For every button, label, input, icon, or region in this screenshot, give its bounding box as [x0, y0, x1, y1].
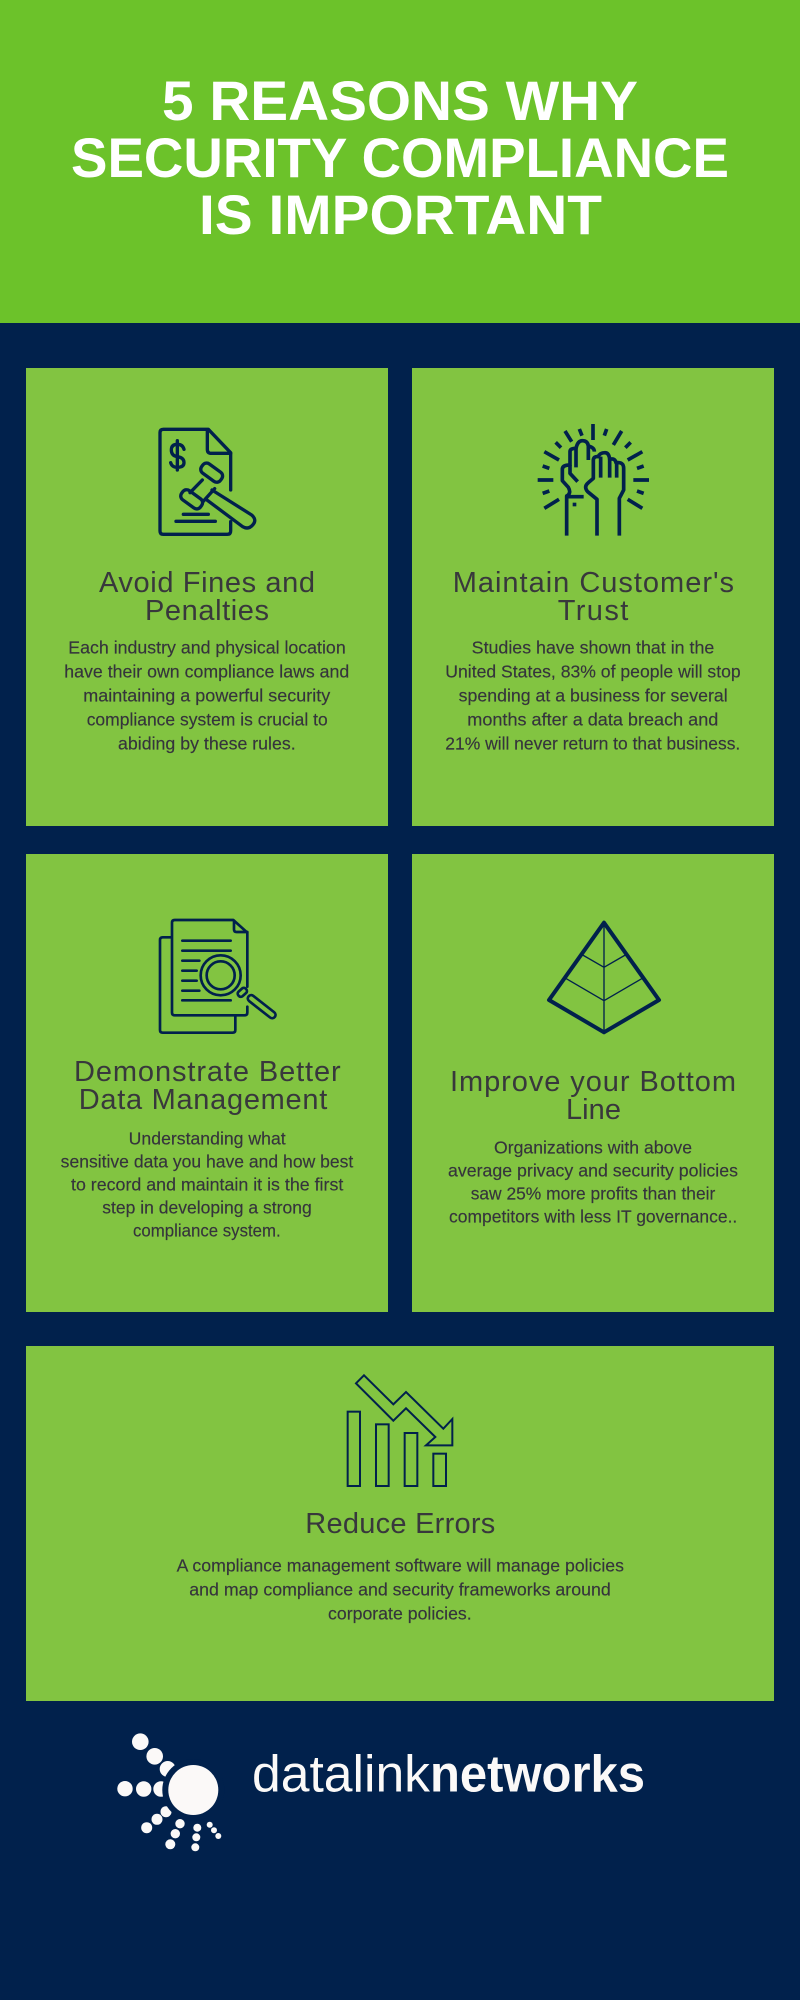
panel: improve your bottom line [412, 854, 774, 1312]
body text: and map compliance and security frameworks around [189, 1579, 611, 1599]
logo wordmark [252, 1746, 645, 1804]
heading: Improve your Bottom [450, 1066, 736, 1098]
body text [64, 637, 349, 753]
body text [445, 637, 741, 753]
heading: Line [566, 1094, 621, 1126]
body text [448, 1137, 738, 1226]
title: SECURITY COMPLIANCE [71, 126, 729, 189]
header banner [0, 0, 800, 323]
heading: Penalties [145, 595, 269, 627]
heading [99, 567, 315, 627]
panel: avoid fines and penalties [26, 368, 388, 826]
body text: Understanding what [129, 1128, 286, 1148]
icon: raised hands with rays [538, 424, 649, 536]
icon: pyramid [549, 923, 659, 1032]
icon: document with gavel [160, 429, 255, 534]
body text: abiding by these rules. [118, 733, 296, 753]
body text: compliance system is crucial to [87, 709, 328, 729]
body text: have their own compliance laws and [64, 661, 349, 681]
body text: 21% will never return to that business. [445, 733, 740, 753]
panel: reduce errors [26, 1346, 774, 1701]
logo: datalink networks [117, 1733, 645, 1851]
body text: to record and maintain it is the first [71, 1174, 343, 1194]
body text: maintaining a powerful security [83, 685, 331, 705]
body text: Each industry and physical location [68, 637, 346, 657]
title: IS IMPORTANT [199, 183, 602, 246]
body text: months after a data breach and [467, 709, 718, 729]
body text [177, 1555, 624, 1623]
logo wordmark: datalink [252, 1746, 431, 1804]
heading: Maintain Customer's [453, 567, 734, 599]
body text: Organizations with above [494, 1137, 692, 1157]
body text: step in developing a strong [102, 1197, 312, 1217]
body text: United States, 83% of people will stop [445, 661, 741, 681]
icon: documents with magnifying glass [160, 920, 277, 1033]
heading [74, 1056, 341, 1116]
icon: falling bar chart with arrow [348, 1375, 452, 1486]
panel: demonstrate better data management [26, 854, 388, 1312]
body text: corporate policies. [328, 1603, 472, 1623]
body text [61, 1128, 353, 1241]
title: 5 REASONS WHY [162, 69, 638, 132]
body text: average privacy and security policies [448, 1160, 738, 1180]
body text: saw 25% more profits than their [471, 1183, 715, 1203]
panel: maintain customer's trust [412, 368, 774, 826]
heading: Reduce Errors [305, 1508, 495, 1540]
heading: Demonstrate Better [74, 1056, 341, 1088]
icon: dotted sun logo mark [117, 1733, 224, 1851]
body text: A compliance management software will manage policies [177, 1555, 624, 1575]
heading: Avoid Fines and [99, 567, 315, 599]
body text: spending at a business for several [459, 685, 728, 705]
heading [450, 1066, 736, 1126]
body text: Studies have shown that in the [472, 637, 714, 657]
body text: compliance system. [133, 1221, 281, 1241]
title [71, 69, 729, 246]
body text: competitors with less IT governance.. [449, 1206, 737, 1226]
body text: sensitive data you have and how best [61, 1151, 353, 1171]
heading: Trust [558, 595, 628, 627]
heading: Data Management [79, 1084, 327, 1116]
heading [453, 567, 734, 627]
logo wordmark: networks [430, 1746, 645, 1804]
